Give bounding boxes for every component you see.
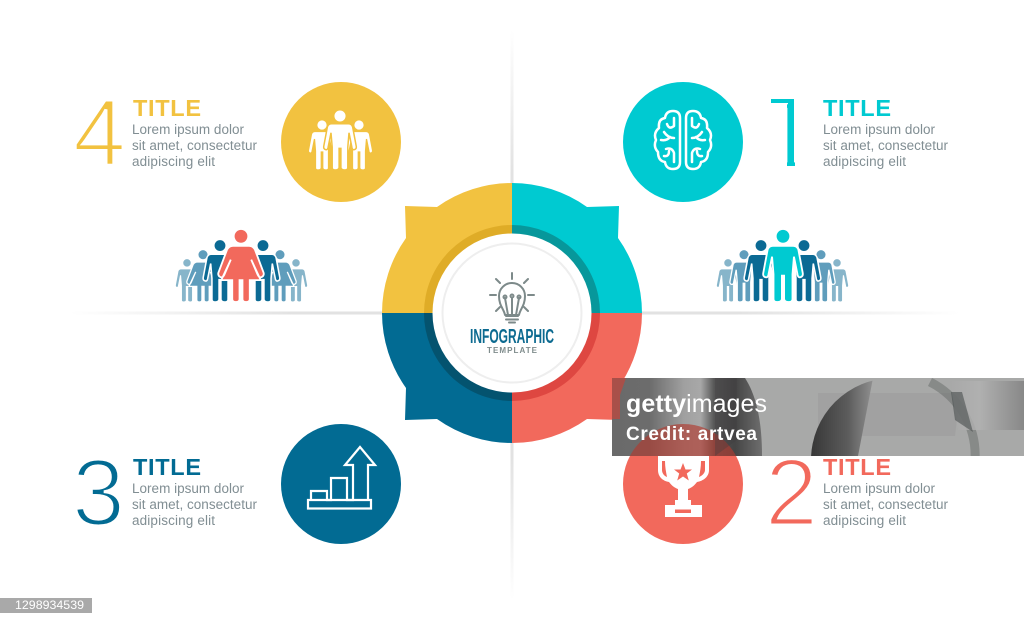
icon: family in yellow circle — [281, 82, 401, 202]
panel: step 3 — [72, 440, 258, 546]
text block: Lorem ipsum dolor — [823, 481, 936, 496]
horizontal divider — [70, 312, 960, 314]
center title: INFOGRAPHIC — [470, 325, 554, 348]
text block: adipiscing elit — [823, 513, 906, 528]
number 4: 4 — [73, 80, 126, 186]
watermark band — [612, 378, 1024, 456]
central wheel — [382, 183, 642, 443]
wheel segment: coral — [512, 313, 642, 443]
icon: growth chart in blue circle — [281, 424, 401, 544]
text block: Lorem ipsum dolor — [823, 122, 936, 137]
icon: brain in teal circle — [623, 82, 743, 202]
vertical divider — [510, 30, 514, 600]
number 2: 2 — [765, 440, 818, 546]
heading: TITLE — [823, 454, 891, 480]
wheel segment: blue — [382, 313, 512, 443]
people group: male leader — [716, 229, 849, 302]
icon: trophy in coral circle — [623, 424, 743, 544]
text block: sit amet, consectetur — [823, 138, 948, 153]
credit: Credit: artvea — [626, 424, 757, 445]
image id tag: 1298934539 — [15, 598, 84, 612]
text block — [132, 481, 258, 528]
panel: step 1 — [771, 99, 948, 169]
heading: TITLE — [823, 95, 891, 121]
people group: female leader — [175, 229, 308, 302]
text block: adipiscing elit — [132, 154, 215, 169]
text block — [823, 481, 948, 528]
text block: adipiscing elit — [132, 513, 215, 528]
text block: Lorem ipsum dolor — [132, 481, 244, 496]
getty images logo: gettyimages — [626, 390, 767, 418]
text block: sit amet, consectetur — [823, 497, 948, 512]
text block: sit amet, consectetur — [132, 138, 258, 153]
text block — [823, 122, 948, 169]
text block — [132, 122, 258, 169]
center subtitle: TEMPLATE — [487, 346, 538, 355]
heading: TITLE — [133, 95, 201, 121]
text block: adipiscing elit — [823, 154, 906, 169]
text block: sit amet, consectetur — [132, 497, 258, 512]
heading: TITLE — [133, 454, 201, 480]
number 3: 3 — [72, 440, 125, 546]
wheel segment: yellow — [382, 183, 512, 313]
wheel segment: teal — [512, 183, 642, 313]
number 1: 1 — [762, 83, 815, 189]
panel: step 4 — [73, 80, 258, 186]
text block: Lorem ipsum dolor — [132, 122, 244, 137]
inner ring — [424, 225, 600, 401]
icon: light bulb — [490, 273, 534, 322]
center disc — [432, 234, 592, 392]
panel: step 2 — [765, 440, 948, 546]
number 1 — [771, 99, 795, 166]
